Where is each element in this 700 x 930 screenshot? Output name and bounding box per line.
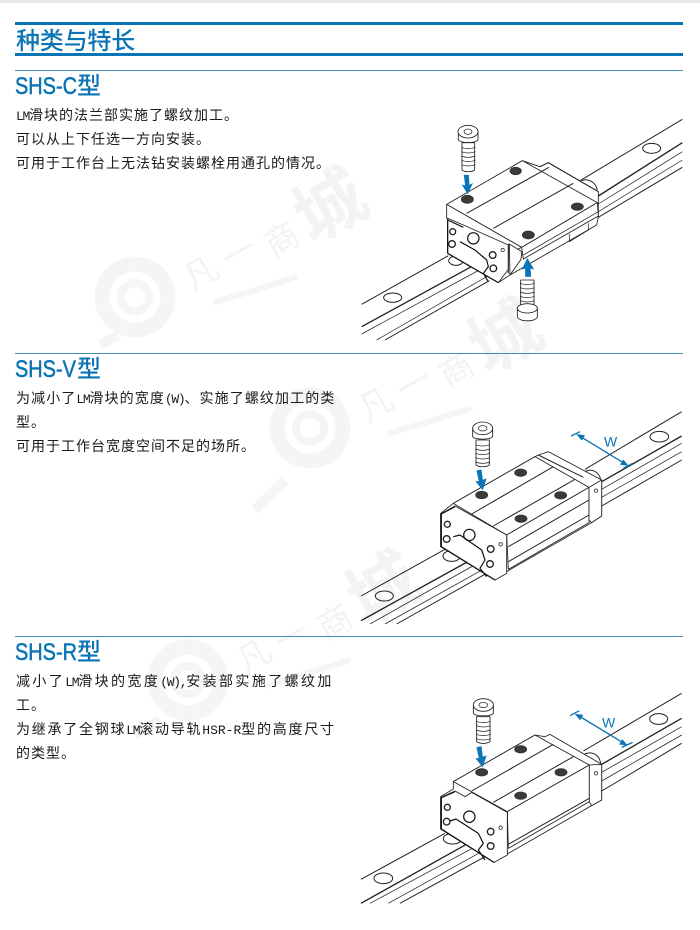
arrow: down onto top hole	[462, 175, 473, 194]
text: SHS-V description	[16, 388, 335, 456]
linear block	[441, 734, 602, 862]
text: SHS-V description: 可用于工作台宽度空间不足的场所。	[16, 436, 256, 456]
heading: SHS-V: SHS-V	[15, 356, 76, 383]
watermarks: 一	[264, 604, 317, 664]
icon: bolt	[473, 699, 493, 743]
linear block	[447, 161, 598, 283]
text: SHS-C description: 可以从上下任选一方向安装。	[16, 129, 211, 149]
watermarks: 商	[254, 207, 307, 267]
rail lines	[361, 412, 682, 624]
dimension: W	[571, 432, 633, 468]
heading: SHS-V	[15, 349, 101, 384]
section rule: SHS-V	[15, 353, 683, 354]
heading: SHS-R	[15, 632, 101, 667]
watermarks: 凡	[226, 624, 279, 684]
heading: SHS-V: 型	[77, 349, 101, 384]
text: SHS-V description: 为减小了LM滑块的宽度(W)、实施了螺纹加工的类	[16, 388, 335, 408]
diagram: SHS-V block on rail	[360, 411, 682, 624]
title: 种类与特长	[16, 21, 135, 56]
watermarks: 一	[386, 352, 439, 412]
rail lines	[362, 119, 682, 340]
text: SHS-R description: 的类型。	[16, 743, 76, 763]
watermarks: 城	[447, 272, 558, 394]
heading: SHS-C: 型	[77, 66, 101, 101]
text: SHS-R description: 减小了LM滑块的宽度(W),安装部实施了螺纹加	[16, 671, 334, 691]
linear block	[441, 452, 602, 580]
text: SHS-C description	[16, 105, 331, 173]
section rule: SHS-R	[15, 636, 683, 637]
section rule: SHS-C	[15, 70, 683, 71]
watermarks: 一	[210, 221, 264, 281]
text: SHS-R description: 工。	[16, 695, 46, 715]
heading: SHS-R: SHS-R	[15, 639, 77, 666]
heading: SHS-C: SHS-C	[15, 73, 77, 100]
title rule bottom	[15, 53, 683, 56]
top grey band	[0, 0, 700, 3]
dimension: W	[570, 711, 633, 747]
rail lines	[361, 693, 682, 903]
text: SHS-V description: 型。	[16, 412, 46, 432]
text: SHS-R description: 为继承了全钢球LM滚动导轨HSR-R型的高度尺寸	[16, 719, 336, 739]
dimension: W: W	[602, 714, 616, 730]
dimension: W: W	[604, 434, 618, 450]
watermarks: 商	[306, 590, 360, 650]
watermarks: 城	[272, 141, 383, 263]
arrow: down onto hole	[476, 470, 486, 490]
watermarks: 凡	[348, 372, 401, 432]
text: SHS-C description: 可用于工作台上无法钻安装螺栓用通孔的情况。	[16, 153, 331, 173]
icon: bolt	[473, 422, 493, 467]
heading: SHS-C	[15, 66, 101, 101]
watermarks: 凡	[172, 241, 226, 301]
arrow: up into flange	[522, 258, 534, 277]
title rule top	[15, 22, 683, 25]
text: SHS-C description: LM滑块的法兰部实施了螺纹加工。	[16, 105, 239, 125]
arrow: down onto hole	[476, 746, 486, 767]
icon: bottom bolt	[517, 280, 537, 321]
icon: top bolt	[458, 125, 478, 172]
diagram: SHS-C block on rail	[361, 118, 683, 340]
watermarks: 商	[428, 338, 482, 398]
watermarks: 城	[325, 524, 436, 646]
heading: SHS-R: 型	[77, 632, 101, 667]
diagram: SHS-R block on rail	[360, 692, 682, 904]
text: SHS-R description	[16, 671, 336, 763]
